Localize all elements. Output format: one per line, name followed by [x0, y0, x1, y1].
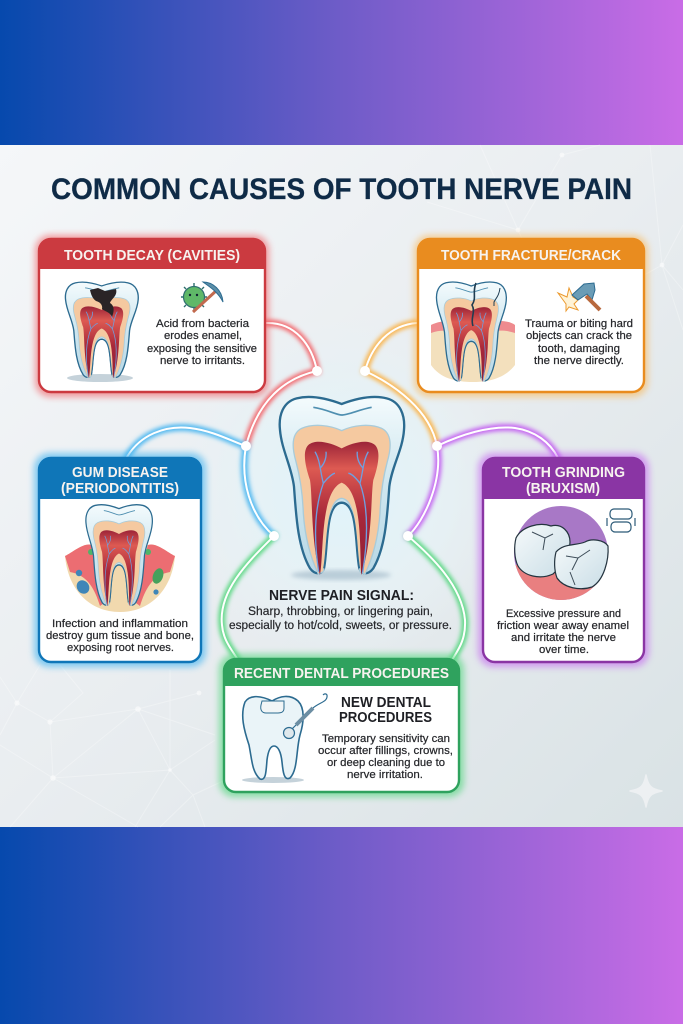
heading: tooth grinding: (BRUXISM) — [526, 481, 600, 497]
panel: gum disease — [34, 453, 206, 667]
heading: tooth decay: TOOTH DECAY (CAVITIES) — [64, 248, 240, 264]
connector: blue — [127, 427, 274, 536]
text: tooth grinding: Excessive pressure and — [506, 608, 621, 620]
connector: red — [246, 323, 317, 446]
icon: grinding molars — [514, 506, 609, 600]
text: recent dental procedures: Temporary sensitivity can — [322, 733, 450, 745]
text: gum disease: destroy gum tissue and bone, — [46, 630, 194, 642]
icon: tooth with gum disease — [65, 505, 175, 612]
icon: cracked tooth in gum — [431, 282, 515, 382]
infographic background — [0, 145, 683, 827]
heading: tooth grinding — [502, 465, 625, 497]
text: tooth decay: Acid from bacteria — [156, 318, 250, 330]
nerve pain signal text: Sharp, throbbing, or lingering pain, — [248, 604, 433, 618]
heading: gum disease: GUM DISEASE — [72, 465, 168, 481]
heading: gum disease: (PERIODONTITIS) — [61, 481, 179, 497]
top gradient band — [0, 0, 683, 145]
panel: tooth fracture — [414, 235, 648, 397]
icon: hammer impact — [558, 283, 600, 311]
subheading: new dental procedures: NEW DENTAL — [341, 695, 431, 711]
icon: tooth with dental tool — [242, 694, 327, 783]
bottom gradient band — [0, 827, 683, 1024]
heading: tooth fracture: TOOTH FRACTURE/CRACK — [441, 248, 621, 264]
text: gum disease — [46, 618, 194, 654]
panel: tooth decay — [35, 235, 269, 397]
connector: orange — [365, 323, 437, 446]
heading: tooth grinding: TOOTH GRINDING — [502, 465, 625, 481]
heading: gum disease — [61, 465, 179, 497]
nerve pain signal text: NERVE PAIN SIGNAL: — [269, 588, 414, 604]
text: recent dental procedures — [318, 733, 453, 781]
header: tooth decay — [38, 238, 266, 269]
text: recent dental procedures: or deep cleaning due to — [327, 757, 445, 769]
icon: teeth clench — [607, 509, 635, 532]
connector nodes — [241, 366, 442, 541]
text: recent dental procedures: nerve irritation. — [347, 769, 423, 781]
text: gum disease: exposing root nerves. — [67, 642, 174, 654]
header: gum disease — [38, 457, 202, 499]
connector: green — [222, 536, 465, 660]
text: tooth fracture: the nerve directly. — [534, 355, 624, 367]
subheading: new dental procedures — [339, 695, 432, 726]
header: tooth fracture — [417, 238, 645, 269]
text: tooth grinding — [497, 608, 629, 656]
icon: decayed tooth — [65, 282, 138, 382]
icon: bacteria and pick — [181, 282, 223, 312]
text: tooth grinding: friction wear away enamel — [497, 620, 629, 632]
text: tooth fracture: objects can crack the — [526, 330, 632, 342]
heading: recent dental procedures: RECENT DENTAL PROCEDURES — [234, 666, 449, 682]
text: tooth decay: erodes enamel, — [164, 330, 242, 342]
text: tooth fracture: tooth, damaging — [538, 343, 620, 355]
text: tooth decay: exposing the sensitive — [147, 343, 257, 355]
icon: sparkle — [630, 775, 662, 807]
text: gum disease: Infection and inflammation — [52, 618, 188, 630]
panel: recent dental procedures — [219, 654, 464, 797]
header: recent dental procedures — [223, 658, 460, 686]
text: tooth decay: nerve to irritants. — [160, 355, 245, 367]
text: tooth fracture: Trauma or biting hard — [525, 318, 633, 330]
connector: purple — [408, 427, 558, 536]
text: tooth grinding: over time. — [539, 644, 589, 656]
header: tooth grinding — [482, 457, 645, 499]
text: tooth fracture — [525, 318, 633, 367]
nerve pain signal text — [229, 588, 452, 632]
text: tooth decay — [147, 318, 257, 367]
text: tooth grinding: and irritate the nerve — [511, 632, 616, 644]
title: COMMON CAUSES OF TOOTH NERVE PAIN — [51, 173, 632, 206]
text: recent dental procedures: occur after fillings, crowns, — [318, 745, 453, 757]
nerve pain signal text: especially to hot/cold, sweets, or pressure. — [229, 618, 452, 632]
subheading: new dental procedures: PROCEDURES — [339, 710, 432, 726]
panel: tooth grinding — [478, 453, 649, 667]
central tooth illustration — [280, 397, 404, 580]
